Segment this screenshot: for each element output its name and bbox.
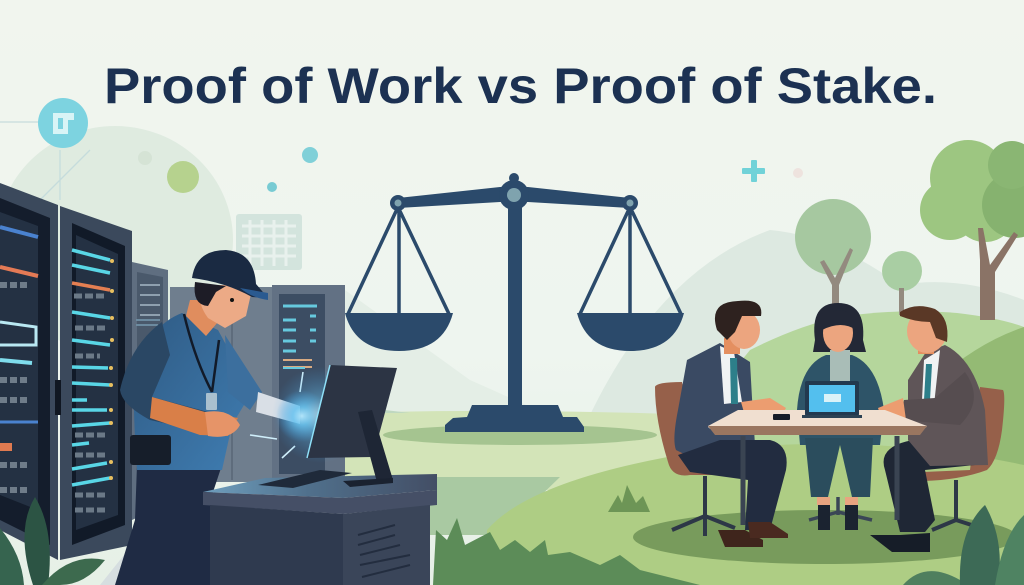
woman centre [797,303,884,530]
man right [870,306,988,552]
sparks [250,372,303,458]
worker belt pouch [130,435,171,465]
landscape: meadow [340,311,1024,585]
server rack: left [0,183,58,560]
table [708,410,927,525]
worker lanyard and badge [184,314,219,392]
balance scale [345,173,684,432]
desk [203,474,437,585]
background server racks [132,262,345,520]
icon: background grid panel [236,214,302,270]
chair right [923,387,1004,530]
grass tufts [608,485,650,512]
worker left arm [120,322,208,432]
phone [773,414,790,420]
worker neck and head [186,300,218,336]
chair left [655,382,735,536]
title: Proof of Work vs Proof of Stake. [104,58,937,114]
large tree [930,140,1006,216]
plant: bottom left [0,497,105,585]
worker [115,250,328,585]
man left [674,301,788,547]
scale base [445,405,584,432]
right pan [577,207,684,351]
trees [795,140,1024,320]
monitor [307,365,397,487]
server rack: middle [59,206,132,560]
glow at hand [276,390,328,442]
decorative dots and plus [138,147,803,193]
floor [100,490,205,585]
left pan [345,207,453,351]
icon: blockchain badge [0,98,90,200]
monitor glow [272,367,368,463]
worker torso [134,313,250,470]
scale pole [508,200,522,406]
keyboard [258,470,352,488]
worker legs [115,465,222,585]
laptop [802,381,862,418]
worker right arm [225,335,262,410]
plant: bottom right [903,505,1024,585]
scale beam [398,187,630,208]
small tree [795,199,871,275]
worker cap [192,250,268,298]
table group [655,301,1004,552]
chair centre base [809,497,872,520]
